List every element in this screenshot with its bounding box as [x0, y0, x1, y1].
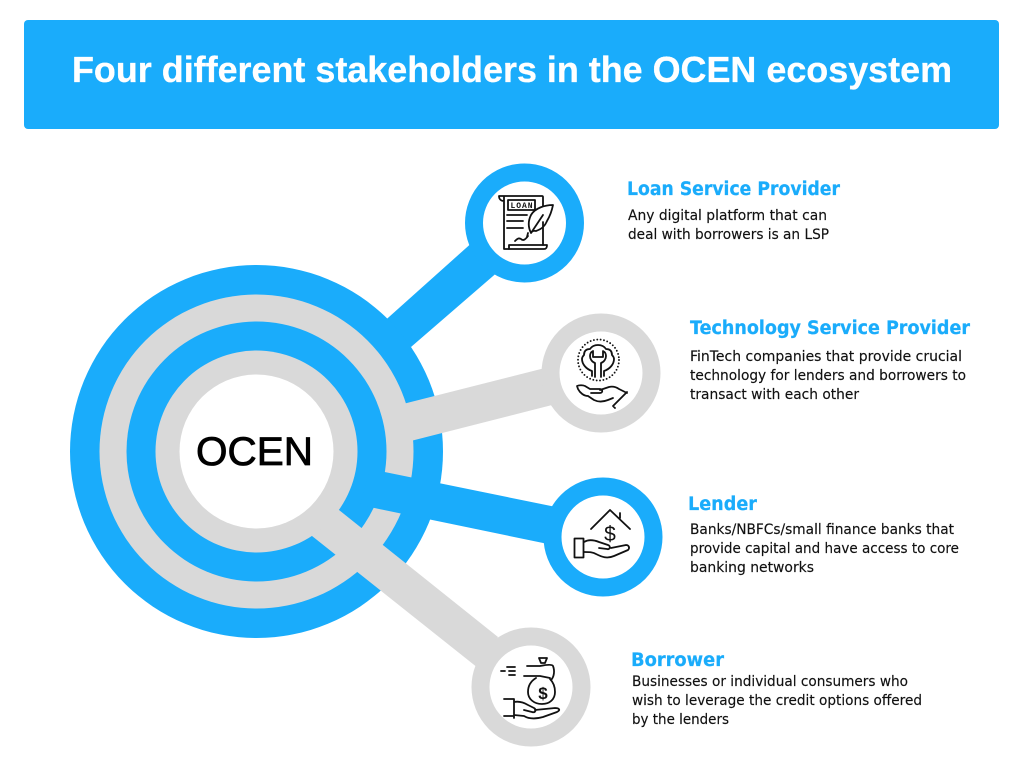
- text: technology service provider: FinTech companies that provide crucial: [690, 349, 962, 365]
- hub inner gray ring: [156, 350, 358, 552]
- text: borrower: by the lenders: [632, 712, 729, 728]
- text: borrower: Businesses or individual consumers who: [632, 674, 908, 690]
- hub and spokes diagram: [70, 240, 556, 668]
- hub center: [180, 374, 334, 528]
- hub outer blue ring: [70, 265, 443, 638]
- text: technology service provider: [690, 318, 971, 403]
- hub outer gray ring: [100, 294, 414, 608]
- text: lender: banking networks: [690, 560, 814, 576]
- hub label: OCEN: [196, 430, 313, 474]
- text: lender: [688, 494, 959, 576]
- icon: house and dollar over hand: $: [604, 523, 616, 546]
- icon: gear and wrench in hand: [577, 340, 627, 408]
- text: borrower: [631, 650, 922, 728]
- title banner: [24, 20, 999, 129]
- text: technology service provider: transact with each other: [690, 387, 859, 403]
- text: loan service provider: deal with borrowers is an LSP: [628, 227, 829, 243]
- text: loan service provider: Any digital platform that can: [628, 208, 827, 224]
- spoke: technology service provider: [395, 368, 556, 445]
- spoke: lender: [360, 469, 556, 544]
- text: loan service provider: Loan Service Provider: [627, 179, 841, 200]
- text: technology service provider: Technology Service Provider: [690, 318, 971, 339]
- text: borrower: wish to leverage the credit options offered: [632, 693, 922, 709]
- text: lender: provide capital and have access to core: [690, 541, 959, 557]
- node: lender: [552, 486, 654, 588]
- title: Four different stakeholders in the OCEN ecosystem: [72, 49, 952, 90]
- icon: loan document with quill: LOAN: [510, 202, 533, 211]
- node: loan service provider: [474, 172, 575, 274]
- text: technology service provider: technology for lenders and borrowers to: [690, 368, 966, 384]
- node: borrower: [480, 636, 582, 738]
- spoke: borrower: [300, 495, 498, 668]
- text: loan service provider: [627, 179, 841, 243]
- icon: money bag over hand: $: [538, 684, 548, 703]
- text: lender: Lender: [688, 494, 758, 515]
- text: borrower: Borrower: [631, 650, 725, 671]
- hub inner blue ring: [126, 322, 386, 582]
- text: lender: Banks/NBFCs/small finance banks that: [690, 522, 954, 538]
- spoke: loan service provider: [380, 240, 500, 347]
- node: technology service provider: [550, 322, 652, 424]
